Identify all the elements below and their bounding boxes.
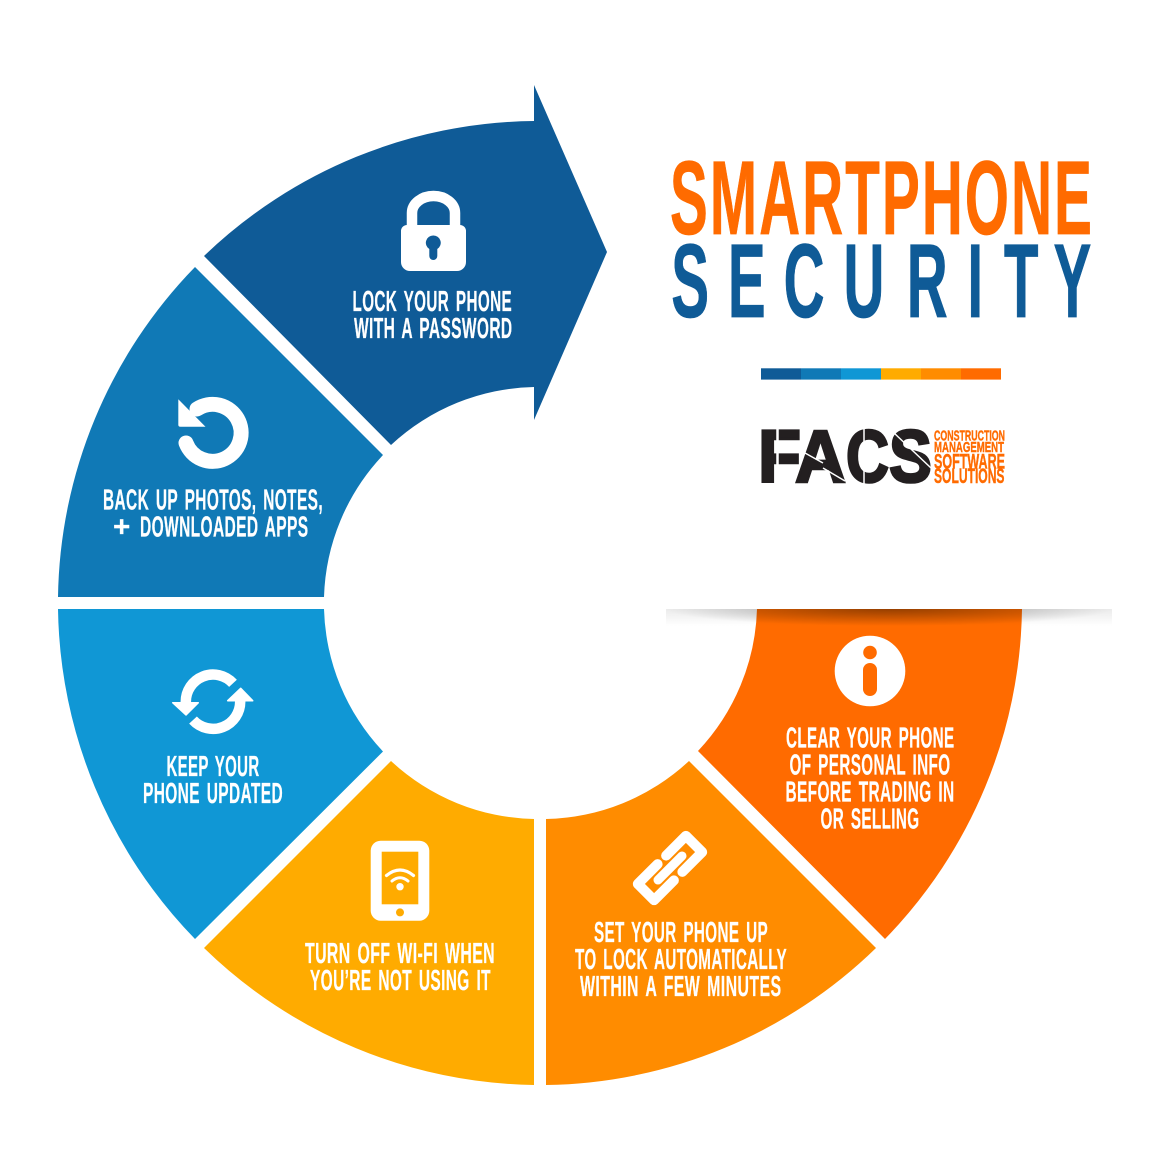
icon: phone with wi-fi [371,841,429,921]
logo: FACS [758,415,1005,498]
label: back up photos: + [113,512,131,544]
logo wordmark: F [758,415,801,498]
segment shape [58,267,383,597]
panel: lock your phone arrow segment [204,85,607,445]
label: lock your phone [352,286,512,345]
panel: turn off wi-fi segment [204,761,534,1085]
logo wordmark: A [795,415,846,498]
logo wordmark: S [889,415,932,498]
label: set your phone up [575,917,787,1003]
icon: chain link [638,836,702,900]
arrow segment shape [204,85,607,445]
label: back up photos: BACK UP PHOTOS, NOTES, [103,484,323,516]
logo tagline: SOFTWARE [934,450,1005,474]
panel: auto lock segment [546,761,876,1085]
panel: keep your phone updated segment [58,609,383,939]
segment shape [698,609,1022,939]
label: turn off wi-fi: TURN OFF WI-FI WHEN [305,938,495,970]
label: keep your phone updated: PHONE UPDATED [143,778,283,810]
logo tagline [934,428,1005,488]
label: lock your phone: LOCK YOUR PHONE [352,286,512,318]
drop shadow under title card [666,609,1112,626]
logo wordmark: C [846,415,889,498]
logo tagline: CONSTRUCTION [934,428,1005,444]
segment shape [58,609,383,939]
panel: back up segment [58,267,383,597]
label: clear your phone: BEFORE TRADING IN [786,776,954,808]
segment shape [546,761,876,1085]
label: set your phone up: TO LOCK AUTOMATICALLY [575,944,787,976]
logo tagline: SOLUTIONS [934,465,1004,488]
label: clear your phone: CLEAR YOUR PHONE [786,722,954,754]
label: keep your phone updated: KEEP YOUR [166,751,260,783]
label: clear your phone: OR SELLING [820,804,920,836]
title: security: SECURITY [671,222,1091,339]
label: set your phone up: SET YOUR PHONE UP [594,917,768,949]
logo stencil cuts [778,428,931,486]
icon: sync arrows [173,675,253,729]
label: back up photos [103,484,323,544]
icon: padlock [401,196,466,271]
logo tagline: MANAGEMENT [934,439,1004,456]
panel: clear your phone segment [698,609,1022,939]
segment shape [204,761,534,1085]
label: set your phone up: WITHIN A FEW MINUTES [580,971,782,1003]
icon: circular back arrow [178,399,241,461]
label: keep your phone updated [143,751,283,810]
label: turn off wi-fi: YOU’RE NOT USING IT [310,965,491,997]
label: turn off wi-fi [305,938,495,997]
label: lock your phone: WITH A PASSWORD [354,313,512,345]
icon: info circle [835,636,905,706]
logo wordmark [758,415,932,498]
colour divider bar [761,368,1001,380]
label: back up photos: DOWNLOADED APPS [140,512,308,544]
label: clear your phone: OF PERSONAL INFO [790,750,950,782]
label: clear your phone [786,722,954,836]
